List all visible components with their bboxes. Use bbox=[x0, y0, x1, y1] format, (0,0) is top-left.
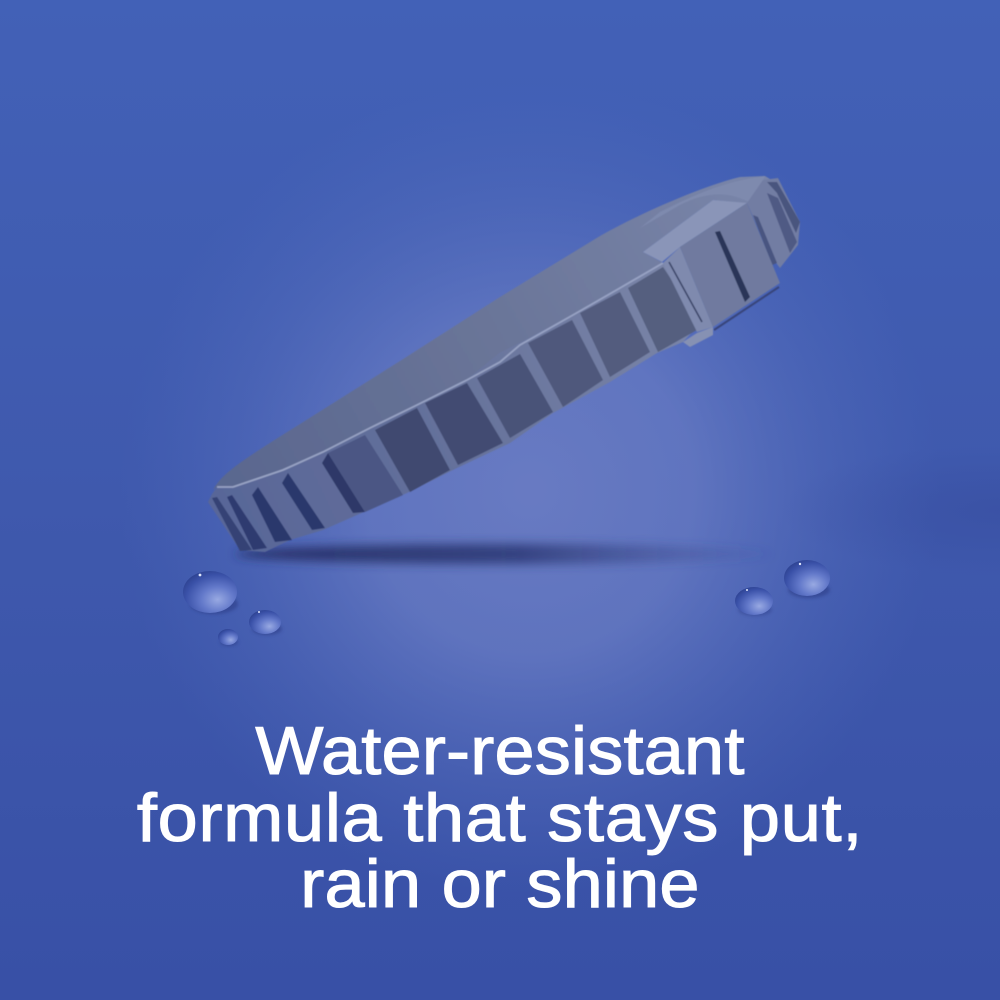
icon: grey wristband bbox=[208, 176, 800, 552]
clasp slot bbox=[715, 231, 750, 302]
band shadow bbox=[235, 544, 775, 564]
clasp rear band segments bbox=[747, 178, 800, 268]
recessed panels bbox=[212, 267, 700, 551]
clasp front bbox=[680, 203, 780, 327]
band top rim highlight bbox=[217, 263, 663, 487]
clasp top bbox=[643, 200, 747, 262]
clasp lip bbox=[683, 327, 713, 347]
heading: rain or shine bbox=[300, 846, 700, 922]
strap loop behind clasp bbox=[640, 176, 765, 228]
band inner surface bbox=[213, 176, 775, 490]
clasp under shadow bbox=[714, 287, 779, 330]
heading: Water-resistant bbox=[255, 713, 745, 789]
heading: formula that stays put, bbox=[137, 780, 863, 856]
icon: water droplets bbox=[183, 560, 830, 646]
clasp rib groove bbox=[669, 262, 702, 322]
band front face bbox=[208, 263, 700, 552]
clasp rib bbox=[663, 247, 713, 332]
